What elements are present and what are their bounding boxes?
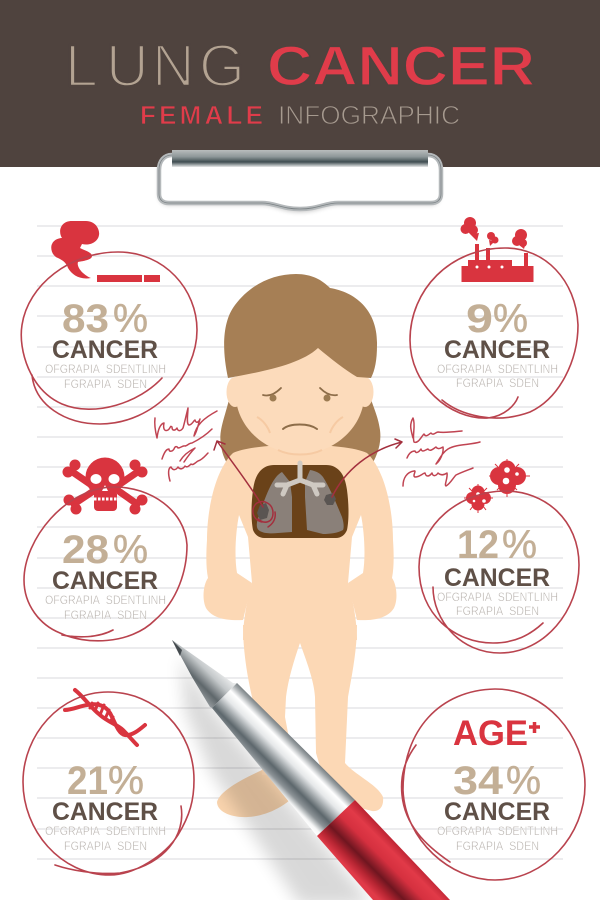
- label: CANCER: [444, 564, 550, 592]
- label: CANCER: [52, 567, 158, 595]
- label: CANCER: [52, 798, 158, 826]
- panel: toxins 28%: [24, 458, 187, 641]
- percentage: %: [506, 759, 541, 803]
- left leg: [243, 625, 300, 775]
- tumor right: [324, 493, 336, 505]
- tumor left: [257, 503, 269, 520]
- arrow: right tumor to note: [332, 439, 402, 497]
- hand drawn ring: [21, 252, 197, 424]
- age heading: AGE: [453, 714, 528, 753]
- header band: [0, 0, 600, 167]
- percentage: 28: [62, 528, 109, 572]
- percentage: %: [493, 297, 528, 341]
- left lung: [257, 472, 292, 533]
- percentage: 12: [457, 523, 499, 567]
- percentage: %: [113, 528, 148, 572]
- left foot: [217, 745, 300, 817]
- caption: [437, 590, 558, 618]
- caption: FGRAPIA SDEN: [456, 604, 539, 618]
- clipboard clip: [159, 150, 441, 212]
- neck shading: [278, 450, 322, 454]
- percentage: [62, 528, 148, 572]
- title: lung: LUNG: [65, 33, 245, 99]
- cheek creases: [257, 417, 343, 433]
- hand drawn ring: [402, 689, 585, 880]
- percentage: 34: [453, 759, 504, 803]
- eye left: [270, 394, 276, 402]
- pen red barrel: [317, 800, 450, 900]
- subtitle: female: FEMALE: [140, 100, 263, 130]
- hand drawn ring: [419, 491, 579, 653]
- percentage: 21: [67, 759, 108, 803]
- torso: [233, 445, 367, 640]
- percentage: [453, 759, 541, 803]
- hand drawn ring: [24, 487, 187, 641]
- caption: OFGRAPIA SDENTLINH: [437, 824, 558, 838]
- left arm: [204, 453, 252, 620]
- caption: OFGRAPIA SDENTLINH: [45, 362, 166, 376]
- percentage: 83: [62, 297, 109, 341]
- right arm: [348, 453, 396, 620]
- label: CANCER: [444, 798, 550, 826]
- percentage: %: [113, 297, 148, 341]
- caption: [45, 593, 166, 622]
- pen: [172, 640, 450, 900]
- percentage: %: [502, 523, 537, 567]
- caption: OFGRAPIA SDENTLINH: [437, 362, 558, 376]
- panel: smoking 83%: [21, 221, 197, 424]
- panel: cancer cells 12%: [419, 459, 579, 653]
- percentage: [457, 523, 537, 567]
- eyebrows: [263, 388, 337, 396]
- icon: smoke and cigarette: [51, 221, 160, 282]
- handwriting note right: [403, 418, 480, 486]
- right leg and foot: [300, 625, 383, 811]
- pen silver barrel: [212, 683, 355, 836]
- handwriting note left: [155, 408, 217, 481]
- pen shadow: [180, 655, 373, 900]
- caption: OFGRAPIA SDENTLINH: [45, 824, 166, 838]
- percentage: [67, 759, 144, 803]
- title: cancer: CANCER: [267, 34, 535, 97]
- icon: cancer cells: [464, 459, 530, 513]
- caption: FGRAPIA SDEN: [64, 839, 147, 853]
- percentage: [62, 297, 148, 341]
- icon: dna helix: [65, 690, 145, 745]
- caption: FGRAPIA SDEN: [64, 377, 147, 391]
- caption: [45, 824, 166, 853]
- caption: [45, 362, 166, 391]
- label: CANCER: [52, 336, 158, 364]
- arrow: left tumor to note: [214, 441, 263, 507]
- panel: genetics 21%: [23, 690, 194, 875]
- caption: FGRAPIA SDEN: [64, 608, 147, 622]
- trachea and bronchi: [277, 463, 323, 494]
- panel: pollution 9%: [410, 217, 578, 418]
- chest x-ray panel: [252, 463, 348, 538]
- icon: factory: [460, 217, 534, 282]
- subtitle: infographic: INFOGRAPHIC: [278, 100, 460, 130]
- mouth: [283, 424, 317, 429]
- back hair: [220, 395, 380, 468]
- eye right: [324, 394, 330, 402]
- icon: skull and crossbones: [62, 458, 148, 514]
- pen tip: [172, 640, 237, 708]
- caption: OFGRAPIA SDENTLINH: [437, 590, 558, 604]
- front hair: [224, 274, 377, 378]
- tumor circle: [253, 502, 275, 527]
- ear left: [226, 377, 244, 407]
- percentage: 9: [466, 297, 493, 341]
- hand drawn ring: [410, 248, 578, 418]
- caption: [437, 362, 558, 390]
- label: CANCER: [444, 336, 550, 364]
- percentage: %: [108, 759, 144, 803]
- percentage: [466, 297, 528, 341]
- ear right: [356, 377, 374, 407]
- panel: age 34%: [402, 689, 585, 880]
- caption: FGRAPIA SDEN: [456, 839, 539, 853]
- face: [236, 340, 364, 454]
- caption: [437, 824, 558, 853]
- character figure: [204, 274, 396, 817]
- right lung: [305, 470, 344, 534]
- hand drawn ring: [23, 692, 194, 875]
- caption: FGRAPIA SDEN: [456, 376, 539, 390]
- caption: OFGRAPIA SDENTLINH: [45, 593, 166, 607]
